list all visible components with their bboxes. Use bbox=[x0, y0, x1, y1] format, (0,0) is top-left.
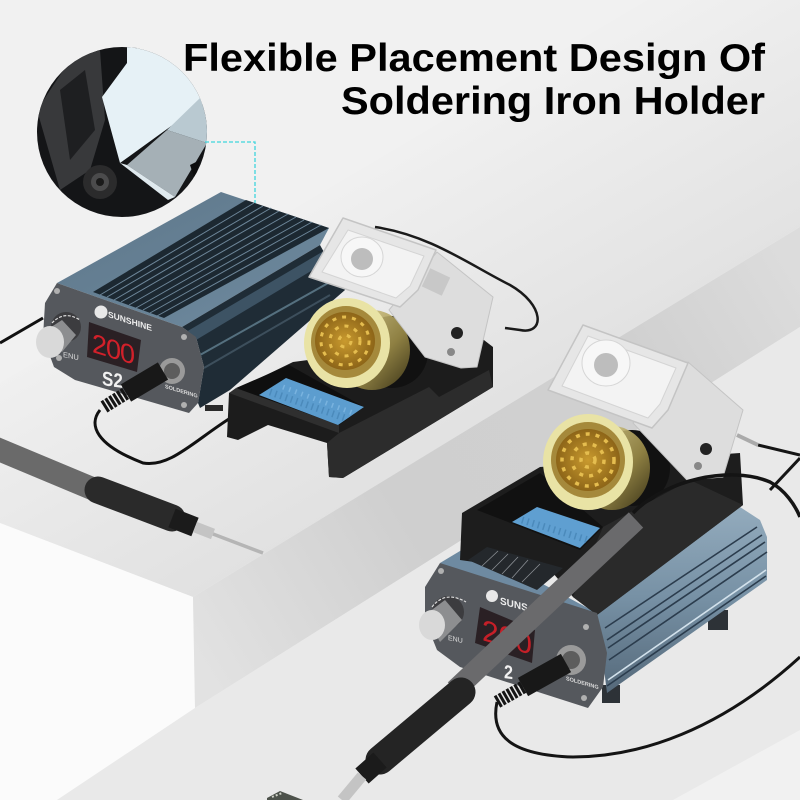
logo bbox=[94, 306, 152, 333]
station two holder base bbox=[460, 453, 743, 615]
cables of station one bbox=[0, 318, 232, 464]
station one cup bbox=[304, 298, 428, 390]
station two front panel bbox=[425, 563, 607, 708]
station two feet bbox=[602, 610, 728, 703]
station one heater cable bbox=[375, 227, 538, 331]
logo: SUNS bbox=[500, 596, 528, 614]
menu label: ENU bbox=[448, 635, 463, 645]
model label: 2 bbox=[504, 661, 513, 684]
station one iron holder bbox=[309, 218, 493, 368]
title: Flexible Placement Design Of bbox=[183, 37, 766, 80]
logo: SUNSHINE bbox=[108, 309, 152, 333]
soldering iron on upper shelf bbox=[0, 448, 263, 553]
station two cup bbox=[543, 414, 670, 510]
station two body bbox=[440, 507, 767, 693]
sponge bbox=[259, 378, 364, 425]
station one holder base bbox=[227, 337, 493, 478]
menu label: ENU bbox=[63, 350, 79, 362]
callout: dashed leader line bbox=[205, 142, 258, 232]
title: Soldering Iron Holder bbox=[341, 80, 765, 123]
station one front panel bbox=[43, 283, 204, 413]
model label: S2 bbox=[102, 367, 123, 392]
station two bbox=[342, 325, 800, 800]
station one knob bbox=[36, 312, 81, 358]
sponge bbox=[512, 507, 600, 548]
circuit board at bottom edge bbox=[267, 791, 303, 800]
display bbox=[87, 322, 141, 372]
inset: close-up of holder bracket bbox=[37, 47, 210, 217]
screw in inset bbox=[83, 165, 117, 199]
station two rear cables bbox=[758, 445, 800, 490]
display: 200 bbox=[92, 328, 135, 371]
station one body bbox=[57, 192, 345, 411]
station two soldering iron bbox=[342, 520, 636, 800]
station two connector bbox=[497, 645, 586, 702]
station one connector bbox=[104, 358, 185, 407]
soldering label: SOLDERING bbox=[566, 676, 599, 691]
station two knob bbox=[419, 596, 466, 642]
title bbox=[183, 37, 766, 123]
station two cords bbox=[496, 475, 800, 757]
logo bbox=[486, 590, 528, 614]
station one bbox=[0, 192, 538, 478]
tray opening fins bbox=[468, 547, 563, 590]
display: 200 bbox=[482, 614, 532, 662]
station two iron holder bbox=[548, 325, 758, 480]
soldering label: SOLDERING bbox=[165, 384, 198, 400]
